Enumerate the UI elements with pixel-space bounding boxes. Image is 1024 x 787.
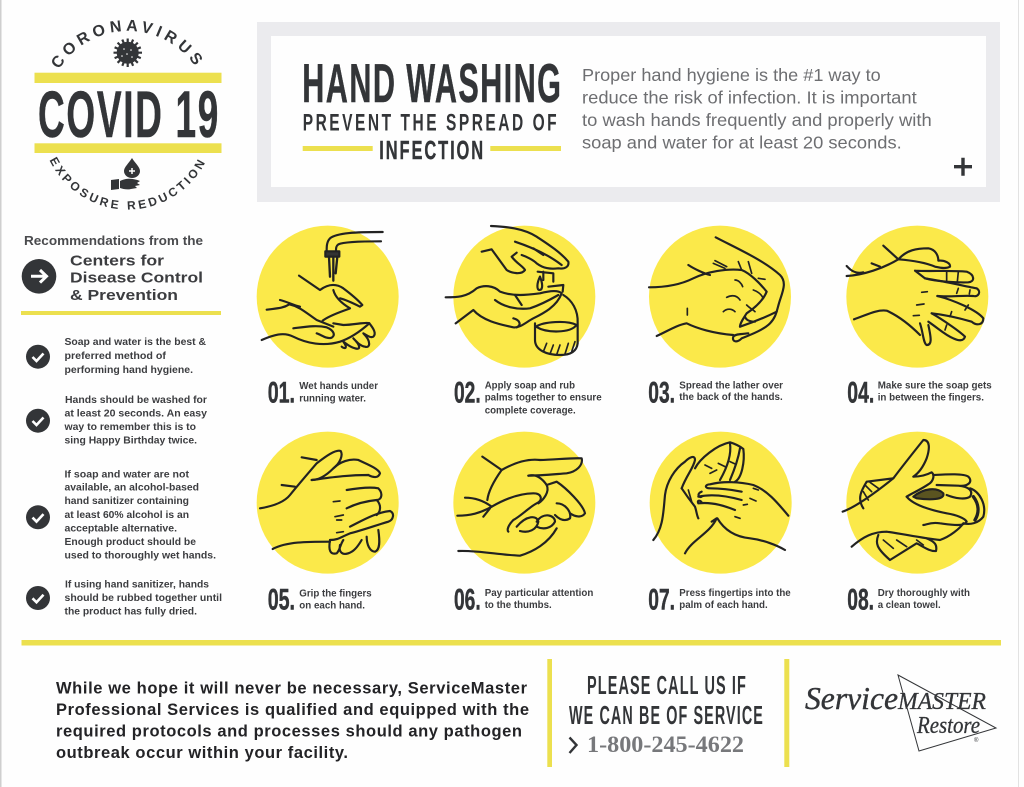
subheading: prevent the spread of: PREVENT THE SPREAD OF [303,109,559,136]
step 01 [257,226,399,410]
panel: recommendations intro [21,233,221,315]
step 07 [648,432,792,616]
caption 04: Make sure the soap gets [878,380,992,391]
number 03: 03. [648,377,675,410]
footer statement: While we hope it will never be necessary, ServiceMaster [56,680,528,698]
footer statement: outbreak occur within your facility. [56,744,348,762]
yellow bar top [34,73,222,83]
check item 2: at least 20 seconds. An easy [64,409,207,420]
caption 02: palms together to ensure [485,392,602,403]
text: intro paragraph: soap and water for at least 20 seconds. [582,132,902,152]
logo: servicemaster restore: Service [805,680,898,716]
check item 3: hand sanitizer containing [64,496,189,507]
caption 05: Grip the fingers [299,589,372,600]
check item 3: used to thoroughly wet hands. [64,550,216,561]
check item 3: Enough product should be [64,537,196,548]
illustration: grip the fingers [257,432,399,574]
caption 02 [485,380,602,416]
panel: hand washing header [257,22,1000,202]
step 02 [446,226,602,416]
text: intro paragraph: reduce the risk of infection. It is important [582,87,917,107]
caption 07: palm of each hand. [679,600,768,611]
step 03 [648,226,791,410]
number 08: 08. [847,583,874,616]
icon: arrow circle [22,259,56,294]
check item 2: Hands should be washed for [65,395,207,406]
caption 04 [878,380,992,404]
icon: plus [954,158,972,176]
caption 04: in between the fingers. [878,393,984,404]
caption 06: to the thumbs. [485,600,552,611]
number 05: 05. [268,583,295,616]
subheading: infection [303,135,561,165]
number 06: 06. [454,583,481,616]
caption 08: Dry thoroughly with [878,588,970,599]
check item 1: preferred method of [64,351,167,362]
text: recommendations from the: Recommendations from the [24,233,203,248]
caption 03: the back of the hands. [679,392,783,403]
caption 01: Wet hands under [299,381,378,392]
check item 3: available, an alcohol-based [64,482,199,493]
logo: servicemaster restore: ® [974,737,979,744]
heading: hand washing: HAND WASHING [302,53,562,114]
icon: chevron [570,738,576,753]
illustration: dry with towel [843,432,988,574]
logo: servicemaster restore [805,675,996,751]
footer statement [56,680,529,762]
step 04 [846,226,992,410]
illustration: apply soap [446,226,595,368]
caption 01: running water. [299,393,366,404]
arc text: exposure reduction: EXPOSURE REDUCTION [50,156,205,210]
arc text: coronavirus: CORONAVIRUS [52,20,202,67]
caption 02: complete coverage. [485,405,576,416]
check item 3: at least 60% alcohol is an [64,510,189,521]
yellow bar bottom [34,143,222,153]
check item 2: way to remember this is to [63,422,196,433]
illustration: between the fingers [846,226,988,368]
icon: virus [114,38,142,67]
logo badge: Covid 19 [34,20,222,210]
step 06 [453,432,595,616]
logo: servicemaster restore: MASTER [897,689,986,715]
text: intro paragraph [582,65,932,152]
call to action: WE CAN BE OF SERVICE [569,700,764,730]
check item 3: If soap and water are not [64,469,190,480]
text: centers for disease control and prevention: Disease Control [70,270,203,287]
logo: servicemaster restore: Restore [916,713,980,739]
caption 03 [679,380,783,403]
check item 4 [26,579,222,618]
illustration: fingertips in palm [650,432,792,574]
text: centers for disease control and prevention: & Prevention [70,287,178,304]
check item 1: Soap and water is the best & [64,337,206,348]
illustration: wet hands [257,226,399,368]
illustration: thumbs [453,432,595,574]
caption 07 [679,588,791,611]
footer statement: required protocols and processes should any pathogen [56,722,522,740]
panel: recommendation checklist [26,337,222,618]
text: intro paragraph: Proper hand hygiene is the #1 way to [582,65,881,85]
caption 05 [299,589,372,612]
check item 2 [26,395,207,446]
number 04: 04. [847,377,874,410]
check item 2: sing Happy Birthday twice. [64,436,197,446]
number 07: 07. [648,583,675,616]
call to action [569,670,764,757]
illustration: back of hands [649,226,791,368]
step 08 [843,432,988,616]
check item 1 [26,337,206,376]
step 05 [257,432,399,616]
caption 07: Press fingertips into the [679,588,791,599]
icon: soap drop over hand [111,158,140,190]
caption 08: a clean towel. [878,600,941,611]
phone number: 1-800-245-4622 [587,732,744,757]
check item 3 [26,469,216,561]
caption 08 [878,588,970,611]
caption 03: Spread the lather over [679,380,783,391]
text: centers for disease control and prevention: Centers for [70,253,164,270]
number 01: 01. [268,377,295,410]
text: intro paragraph: to wash hands frequently and properly with [582,110,932,130]
footer statement: Professional Services is qualified and equipped with the [56,701,529,719]
check item 4: the product has fully dried. [64,607,197,618]
call to action: PLEASE CALL US IF [587,670,747,700]
check item 4: should be rubbed together until [64,593,222,604]
caption 06: Pay particular attention [485,588,593,599]
check item 1: performing hand hygiene. [64,365,193,376]
check item 3: acceptable alternative. [64,524,177,535]
text: centers for disease control and prevention [70,253,203,304]
caption 05: on each hand. [299,601,365,612]
check item 4: If using hand sanitizer, hands [65,579,209,590]
subheading: infection: INFECTION [379,135,485,165]
number 02: 02. [454,377,481,410]
caption 01 [299,381,378,404]
heading: covid 19: COVID 19 [38,77,220,151]
caption 02: Apply soap and rub [485,380,575,391]
caption 06 [485,588,593,611]
